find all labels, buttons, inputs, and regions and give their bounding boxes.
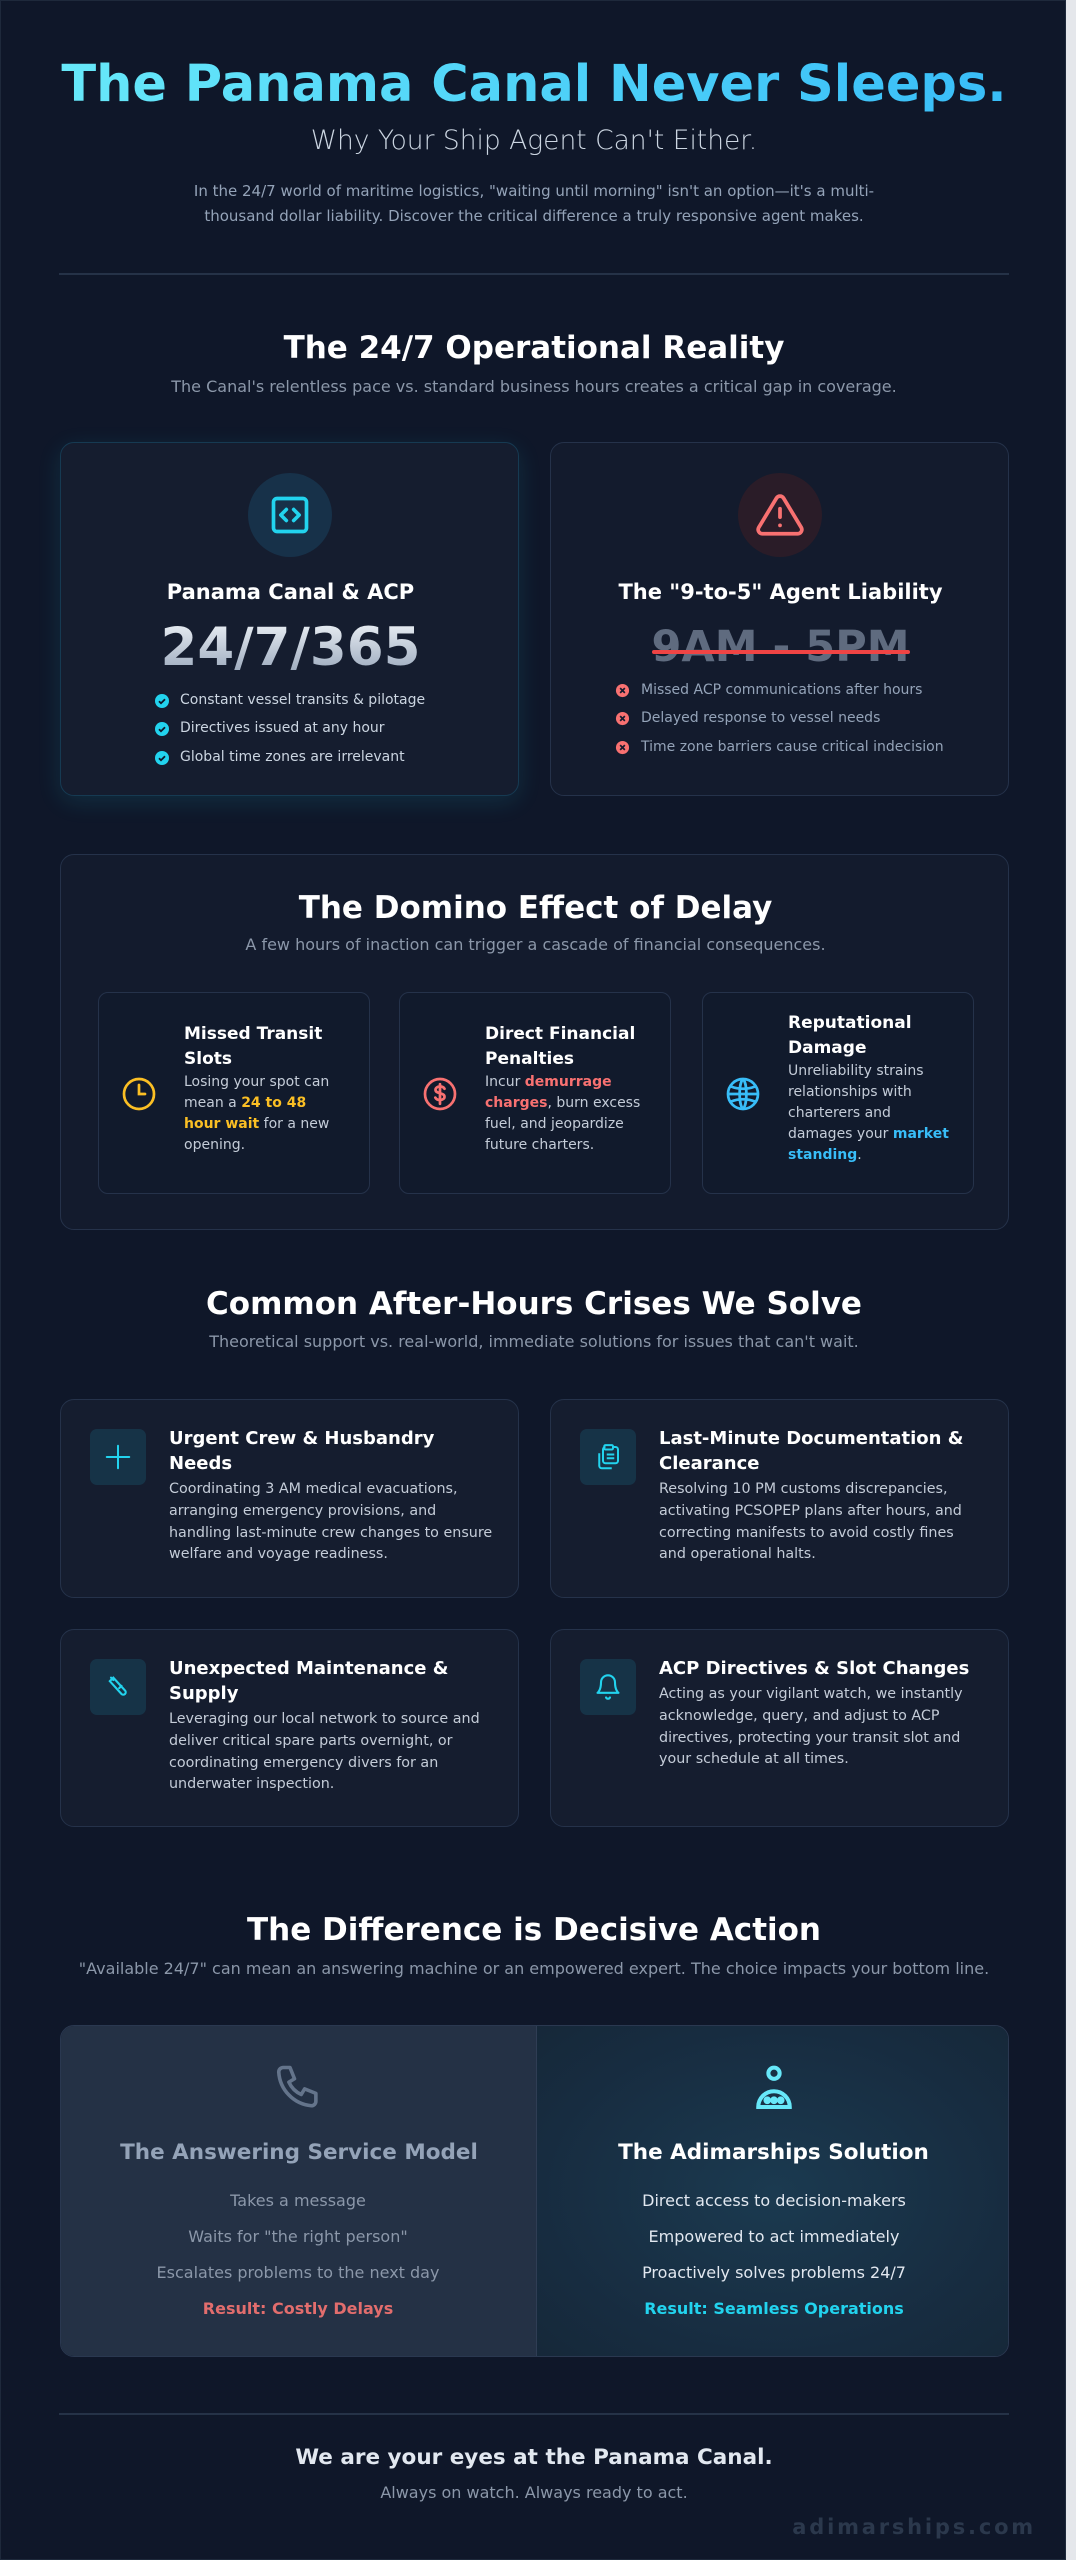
text: Damage: [788, 1038, 866, 1058]
card title: Panama Canal & ACP: [167, 580, 414, 604]
panel: domino effect: [60, 854, 1009, 1230]
column: adimarships: Proactively solves problems 24/7: [642, 2263, 906, 2282]
icon: plus: [90, 1429, 146, 1485]
text: Direct Financial Penalties: [485, 1024, 635, 1069]
text: [169, 1658, 480, 1792]
icon: bell: [580, 1659, 636, 1715]
checklist: Global time zones are irrelevant: [180, 749, 405, 765]
icon: phone: [277, 2066, 318, 2108]
card: ACP directives: [550, 1629, 1009, 1827]
icon: code: [248, 473, 332, 557]
liability list: Time zone barriers cause critical indecision: [641, 739, 944, 755]
liability list: [616, 682, 944, 755]
card: documentation: [550, 1399, 1009, 1598]
liability list: Delayed response to vessel needs: [641, 710, 880, 726]
text: [485, 1024, 640, 1153]
text: Urgent Crew & Husbandry: [169, 1428, 434, 1449]
icon: globe: [726, 1078, 760, 1110]
text: [169, 1428, 492, 1562]
checklist: [155, 692, 425, 765]
big stat: 24/7/365: [160, 617, 420, 678]
card: penalties: [399, 992, 671, 1194]
heading: operational reality: The 24/7 Operational Reality: [284, 330, 784, 366]
items: Takes a message: [230, 2191, 366, 2210]
text: Needs: [169, 1453, 232, 1474]
subheading: "Available 24/7" can mean an answering machine or an empowered expert. The choice impacts your bottom line.: [79, 1959, 989, 1978]
text: [788, 1013, 949, 1163]
column: answering service: Escalates problems to the next day: [157, 2263, 439, 2282]
text: Losing your spot can mean a 24 to 48 hour wait for a new opening.: [184, 1074, 329, 1153]
result: Result: Costly Delays: [203, 2299, 393, 2318]
icon: clipboard: [580, 1429, 636, 1485]
liability list: Missed ACP communications after hours: [641, 682, 922, 698]
text: [184, 1024, 329, 1153]
text: [659, 1428, 963, 1562]
icon: tool: [90, 1659, 146, 1715]
card title: The "9-to-5" Agent Liability: [618, 580, 943, 604]
panel: 9-to-5 liability: [550, 442, 1009, 796]
subtitle: Why Your Ship Agent Can't Either.: [311, 125, 757, 156]
crossed hours: 9AM - 5PM: [652, 622, 910, 672]
text: Incur demurrage charges, burn excess fuel, and jeopardize future charters.: [485, 1074, 640, 1153]
text: Coordinating 3 AM medical evacuations, arranging emergency provisions, and: [169, 1481, 458, 1519]
text: Last-Minute Documentation & Clearance: [659, 1428, 963, 1474]
icon: dollar: [424, 1078, 456, 1110]
card: missed slots: [98, 992, 370, 1194]
footer tagline: We are your eyes at the Panama Canal.: [295, 2445, 773, 2470]
text: Unreliability strains relationships with: [788, 1063, 924, 1100]
text: ACP Directives & Slot Changes: [659, 1658, 969, 1679]
icon: agent: [756, 2066, 792, 2109]
text: Resolving 10 PM customs discrepancies, activating PCSOPEP plans after hours, and correcting manifests to avoid costly fines and operational halts.: [659, 1481, 962, 1562]
column: answering service: [61, 2026, 537, 2358]
text: Unexpected Maintenance & Supply: [169, 1658, 448, 1704]
items: Direct access to decision-makers: [642, 2191, 906, 2210]
card: crew needs: [60, 1399, 519, 1598]
column: adimarships: Empowered to act immediately: [649, 2227, 899, 2246]
column: answering service: Waits for "the right person": [188, 2227, 408, 2246]
text: damages your market standing.: [788, 1126, 949, 1163]
text: Missed Transit Slots: [184, 1024, 322, 1069]
column: adimarships: [537, 2026, 1010, 2358]
title: The Adimarships Solution: [618, 2140, 929, 2165]
subheading: The Canal's relentless pace vs. standard business hours creates a critical gap in coverage.: [171, 377, 897, 396]
brand: adimarships.com: [792, 2515, 1036, 2539]
checklist: Constant vessel transits & pilotage: [180, 692, 425, 708]
text: charterers and: [788, 1105, 891, 1121]
checklist: Directives issued at any hour: [180, 720, 385, 736]
icon: warning: [738, 473, 822, 557]
result: Result: Seamless Operations: [644, 2299, 904, 2318]
text: Acting as your vigilant watch, we instantly acknowledge, query, and adjust to ACP directives, protecting your transit slot and your schedule at all times.: [659, 1686, 963, 1767]
panel: canal 24/7: [60, 442, 519, 796]
title: The Panama Canal Never Sleeps.: [61, 55, 1007, 114]
text: handling last-minute crew changes to ensure welfare and voyage readiness.: [169, 1525, 492, 1562]
card: reputation: [702, 992, 974, 1194]
heading: The Domino Effect of Delay: [299, 890, 772, 926]
icon: clock: [122, 1078, 156, 1110]
title: The Answering Service Model: [120, 2140, 478, 2165]
footer subline: Always on watch. Always ready to act.: [380, 2483, 688, 2502]
intro paragraph: In the 24/7 world of maritime logistics, "waiting until morning" isn't an option—it's a multi-thousand dollar liability. Discover the critical difference a truly responsive agent makes.: [194, 182, 874, 225]
subheading: A few hours of inaction can trigger a cascade of financial consequences.: [245, 935, 826, 954]
comparison panel: [60, 2025, 1009, 2357]
text: Leveraging our local network to source and deliver critical spare parts overnight, or coordinating emergency divers for an underwater inspection.: [169, 1711, 480, 1792]
heading: crises: Common After-Hours Crises We Solve: [206, 1286, 862, 1322]
heading: difference: The Difference is Decisive Action: [247, 1912, 821, 1948]
text: Reputational: [788, 1013, 912, 1033]
subheading: Theoretical support vs. real-world, immediate solutions for issues that can't wait.: [209, 1332, 859, 1351]
card: maintenance: [60, 1629, 519, 1827]
